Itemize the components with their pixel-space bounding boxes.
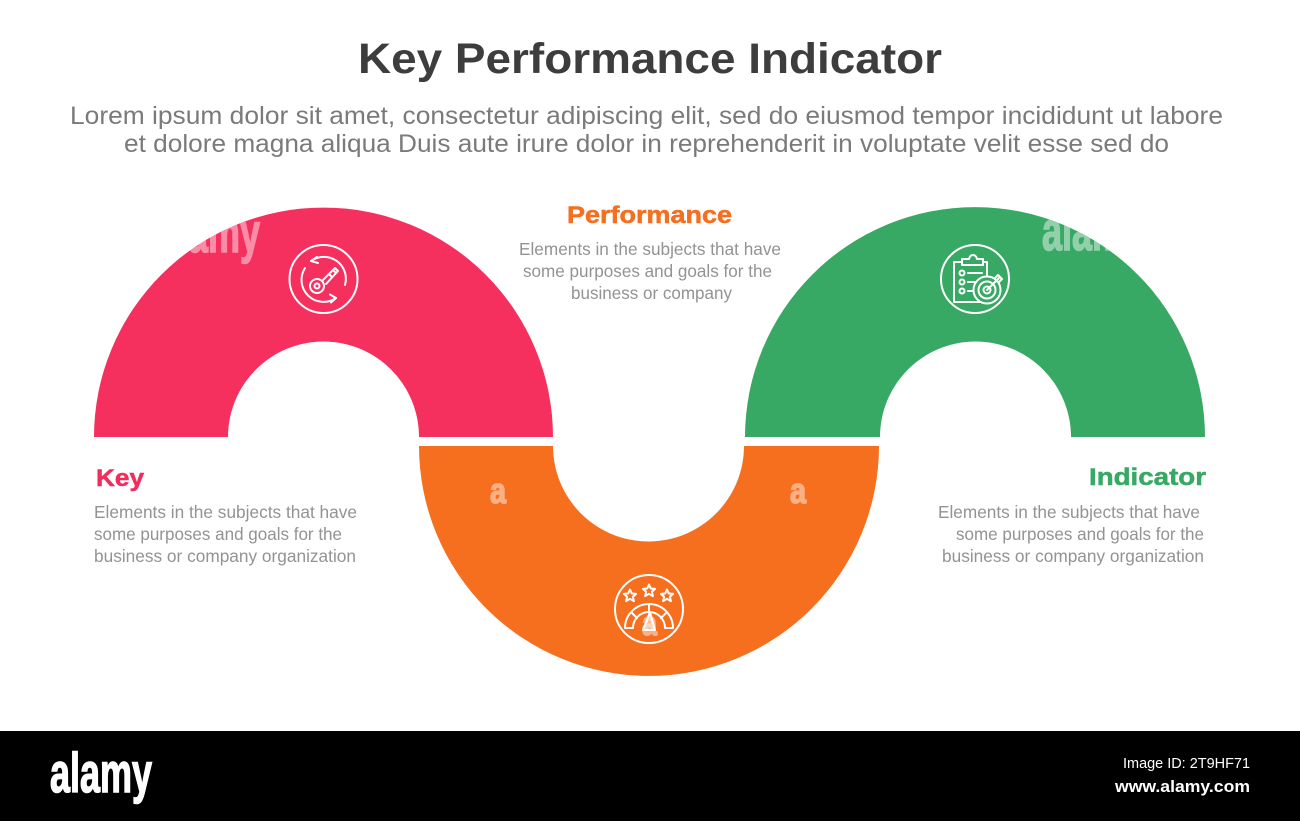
footer band: alamy: [50, 741, 152, 804]
performance label: Performance: [567, 202, 732, 229]
indicator label: [938, 464, 1206, 566]
performance label: [519, 202, 781, 303]
icon: key with circular arrows: [290, 245, 358, 313]
key label: business or company organization: [94, 546, 356, 566]
performance label: some purposes and goals for the: [523, 261, 772, 281]
panel: indicator arch: alamy: [1042, 199, 1144, 262]
panel: performance arch: [419, 446, 879, 676]
key label: some purposes and goals for the: [94, 524, 342, 544]
performance label: business or company: [571, 283, 732, 303]
panel: indicator arch: [745, 199, 1205, 437]
title: Key Performance Indicator: [358, 35, 942, 83]
footer band: www.alamy.com: [1114, 777, 1250, 796]
key label: Key: [96, 465, 145, 492]
performance label: Elements in the subjects that have: [519, 239, 781, 259]
key label: [94, 465, 357, 566]
panel: performance arch: a: [490, 470, 507, 511]
indicator label: some purposes and goals for the: [956, 524, 1204, 544]
intro text: et dolore magna aliqua Duis aute irure dolor in reprehenderit in voluptate velit esse sed do: [124, 130, 1169, 158]
indicator label: Indicator: [1089, 464, 1206, 491]
intro text: Lorem ipsum dolor sit amet, consectetur adipiscing elit, sed do eiusmod tempor incididunt ut labore: [70, 102, 1223, 130]
panel: key arch: [94, 201, 553, 437]
icon: clipboard and target: [941, 245, 1009, 313]
indicator label: business or company organization: [942, 546, 1204, 566]
intro text: [70, 102, 1223, 158]
icon: gauge with three stars: [615, 575, 683, 643]
key label: Elements in the subjects that have: [94, 502, 357, 522]
footer band: Image ID: 2T9HF71: [1123, 755, 1250, 772]
panel: key arch: alamy: [158, 201, 260, 264]
indicator label: Elements in the subjects that have: [938, 502, 1200, 522]
panel: performance arch: a: [790, 470, 807, 511]
footer band: [0, 731, 1300, 821]
panel: performance arch: a: [642, 605, 658, 643]
